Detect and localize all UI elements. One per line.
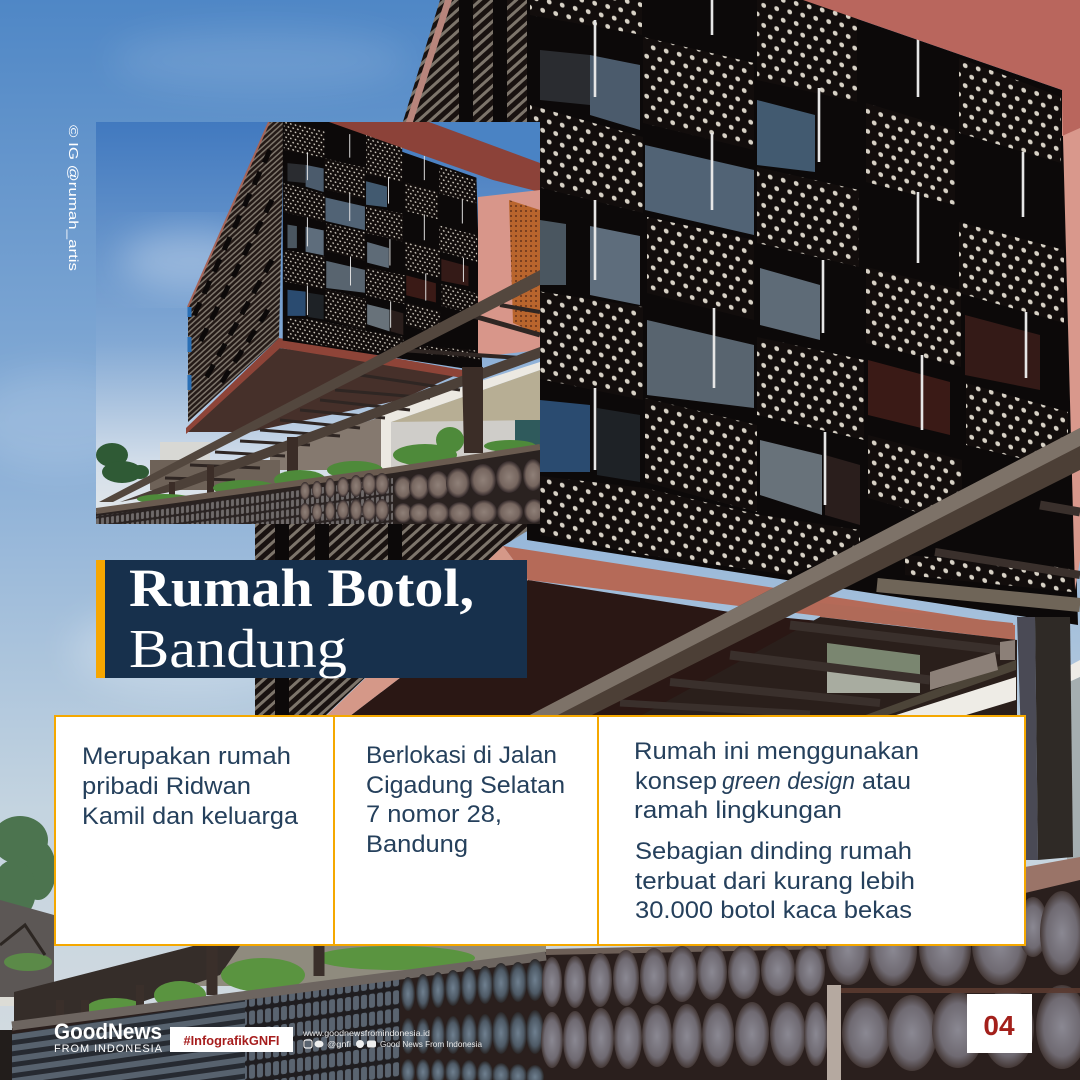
accent bar <box>96 560 105 678</box>
column 3 text: terbuat dari kurang lebih <box>635 868 915 895</box>
building underside <box>326 546 1015 716</box>
inset concrete <box>270 362 540 470</box>
plants <box>87 946 475 1018</box>
inset sky <box>96 122 540 524</box>
photo credit: © IG @rumah_artis <box>66 125 81 272</box>
column 2 text: Cigadung Selatan <box>366 772 565 799</box>
title line 2: Bandung <box>129 618 347 679</box>
inset side facade <box>188 122 284 422</box>
inset background trees and buildings <box>96 442 280 490</box>
column 2 text: Berlokasi di Jalan <box>366 742 557 769</box>
column 1 text: Merupakan rumah <box>82 743 291 770</box>
column 1 text <box>82 743 298 830</box>
website and social handles: Good News From Indonesia <box>380 1039 482 1049</box>
icon: twitter <box>314 1040 324 1048</box>
column 2 text: Bandung <box>366 831 468 858</box>
inset photo <box>96 122 540 524</box>
pergola <box>528 428 1080 860</box>
column 3 text: konsep <box>635 768 717 795</box>
logo: GoodNews <box>54 1019 162 1044</box>
column 2 text: 7 nomor 28, <box>366 801 502 828</box>
roof fascia and pink wall <box>803 0 1080 590</box>
icon: youtube <box>367 1040 376 1048</box>
inset pergola <box>99 270 540 502</box>
column 1 text: pribadi Ridwan <box>82 773 251 800</box>
title background <box>105 560 527 678</box>
column 3 text: Sebagian dinding rumah <box>635 838 912 865</box>
info panel <box>55 716 1025 945</box>
website and social handles: www.goodnewsfromindonesia.id <box>302 1028 430 1038</box>
icon: facebook <box>356 1040 364 1048</box>
logo: FROM INDONESIA <box>54 1043 163 1055</box>
website and social handles <box>302 1028 482 1049</box>
title line 1: Rumah Botol, <box>129 558 474 618</box>
logo <box>54 1019 163 1055</box>
panel background <box>55 716 1025 945</box>
inset fascia and wall <box>329 122 540 357</box>
tree left <box>0 816 56 1006</box>
inset underside <box>186 338 463 434</box>
icon: instagram <box>304 1040 312 1048</box>
inset facade <box>283 112 482 371</box>
column 3 text: green design <box>722 768 855 795</box>
building side facade <box>255 0 545 715</box>
pergola roof lower left <box>14 946 240 1030</box>
column 2 text <box>366 742 565 858</box>
facade with bottle panels <box>527 0 1078 625</box>
column 3 text: Rumah ini menggunakan <box>634 738 919 765</box>
lower wall behind pergola <box>196 946 546 986</box>
column 3 text: ramah lingkungan <box>634 797 842 824</box>
column 1 text: Kamil dan keluarga <box>82 803 298 830</box>
column 3 text: atau <box>862 768 911 795</box>
page number: 04 <box>983 1010 1015 1041</box>
hashtag box: #InfografikGNFI <box>184 1033 280 1048</box>
inset plants <box>137 427 536 504</box>
inset bottle wall <box>96 446 544 524</box>
title block <box>96 558 527 679</box>
hashtag box <box>170 1027 293 1052</box>
column 3 text: 30.000 botol kaca bekas <box>635 897 912 924</box>
page number <box>967 994 1032 1053</box>
column 3 text <box>634 738 919 924</box>
footer <box>54 994 1032 1055</box>
bottle wall <box>0 857 1080 1080</box>
website and social handles: @gnfi <box>327 1039 351 1049</box>
